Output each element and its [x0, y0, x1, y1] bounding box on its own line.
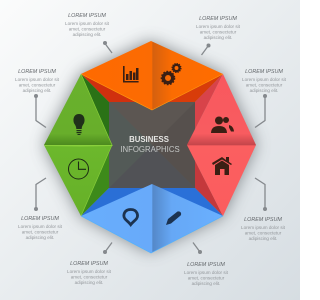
callout: top left [65, 13, 112, 53]
callout: lower right: Lorem ipsum dolor sit [241, 225, 286, 230]
callout: upper right: adipiscing elit. [250, 88, 278, 93]
callout: bottom left: amet, consectetur [71, 274, 108, 280]
callout: upper left: Lorem ipsum dolor sit [15, 77, 60, 82]
callout: bottom left: Lorem ipsum dolor sit [67, 269, 112, 274]
icon: people [211, 116, 234, 133]
callout: top right: amet, consectetur [200, 30, 237, 34]
callout: upper right: Lorem ipsum dolor sit [242, 77, 287, 82]
callout: upper right [242, 69, 287, 128]
icon: bar chart [123, 66, 139, 82]
panel: blue segment [81, 184, 223, 253]
callout: bottom left [67, 242, 112, 285]
icon: gears [162, 64, 181, 84]
callout: bottom right: adipiscing elit. [192, 281, 220, 286]
callout: lower right: LOREM IPSUM [244, 217, 282, 223]
panel: green segment [44, 74, 113, 216]
callout: upper left: adipiscing elit. [23, 88, 51, 93]
callout: lower left: LOREM IPSUM [21, 216, 59, 222]
callout: top right [196, 16, 241, 55]
callout: upper right: LOREM IPSUM [245, 69, 283, 75]
callout: bottom right: LOREM IPSUM [187, 262, 225, 268]
callout: lower left: amet, consectetur [22, 230, 59, 234]
icon: light bulb [73, 114, 85, 135]
callout: lower right: adipiscing elit. [249, 236, 277, 241]
callout: top left: Lorem ipsum dolor sit [65, 21, 110, 26]
callout: top right: Lorem ipsum dolor sit [196, 24, 241, 29]
callout: top left: amet, consectetur [69, 26, 106, 32]
callout: top right: LOREM IPSUM [199, 16, 237, 22]
callout: lower left: Lorem ipsum dolor sit [18, 224, 63, 229]
callout: bottom left: LOREM IPSUM [70, 261, 108, 267]
callout: lower left: adipiscing elit. [26, 235, 54, 240]
title: BUSINESS [129, 135, 169, 144]
icon: clock [68, 159, 88, 179]
callout: upper left: amet, consectetur [19, 82, 56, 88]
inner folds [81, 74, 223, 216]
callout: top left: adipiscing elit. [73, 32, 101, 37]
panel: orange segment [81, 41, 223, 110]
octagon shadow [44, 41, 256, 252]
callout: bottom right: Lorem ipsum dolor sit [184, 270, 229, 275]
center panel [109, 102, 195, 188]
icon: map pin [124, 210, 137, 225]
callout: bottom right: amet, consectetur [188, 276, 225, 280]
icon: pencil [166, 211, 181, 225]
callout: lower right [241, 178, 286, 241]
title: INFOGRAPHICS [120, 145, 180, 154]
icon: house [212, 157, 232, 175]
callout: top right: adipiscing elit. [204, 35, 232, 40]
title [120, 135, 180, 154]
callout: bottom right [184, 242, 229, 286]
callout: top left: LOREM IPSUM [68, 13, 106, 19]
panel: red segment [187, 74, 256, 216]
callout: upper left [15, 69, 60, 128]
callout: lower left [18, 178, 63, 240]
callout: upper left: LOREM IPSUM [18, 69, 56, 75]
callout: upper right: amet, consectetur [246, 82, 283, 88]
callout: bottom left: adipiscing elit. [75, 280, 103, 285]
callout: lower right: amet, consectetur [245, 230, 282, 236]
